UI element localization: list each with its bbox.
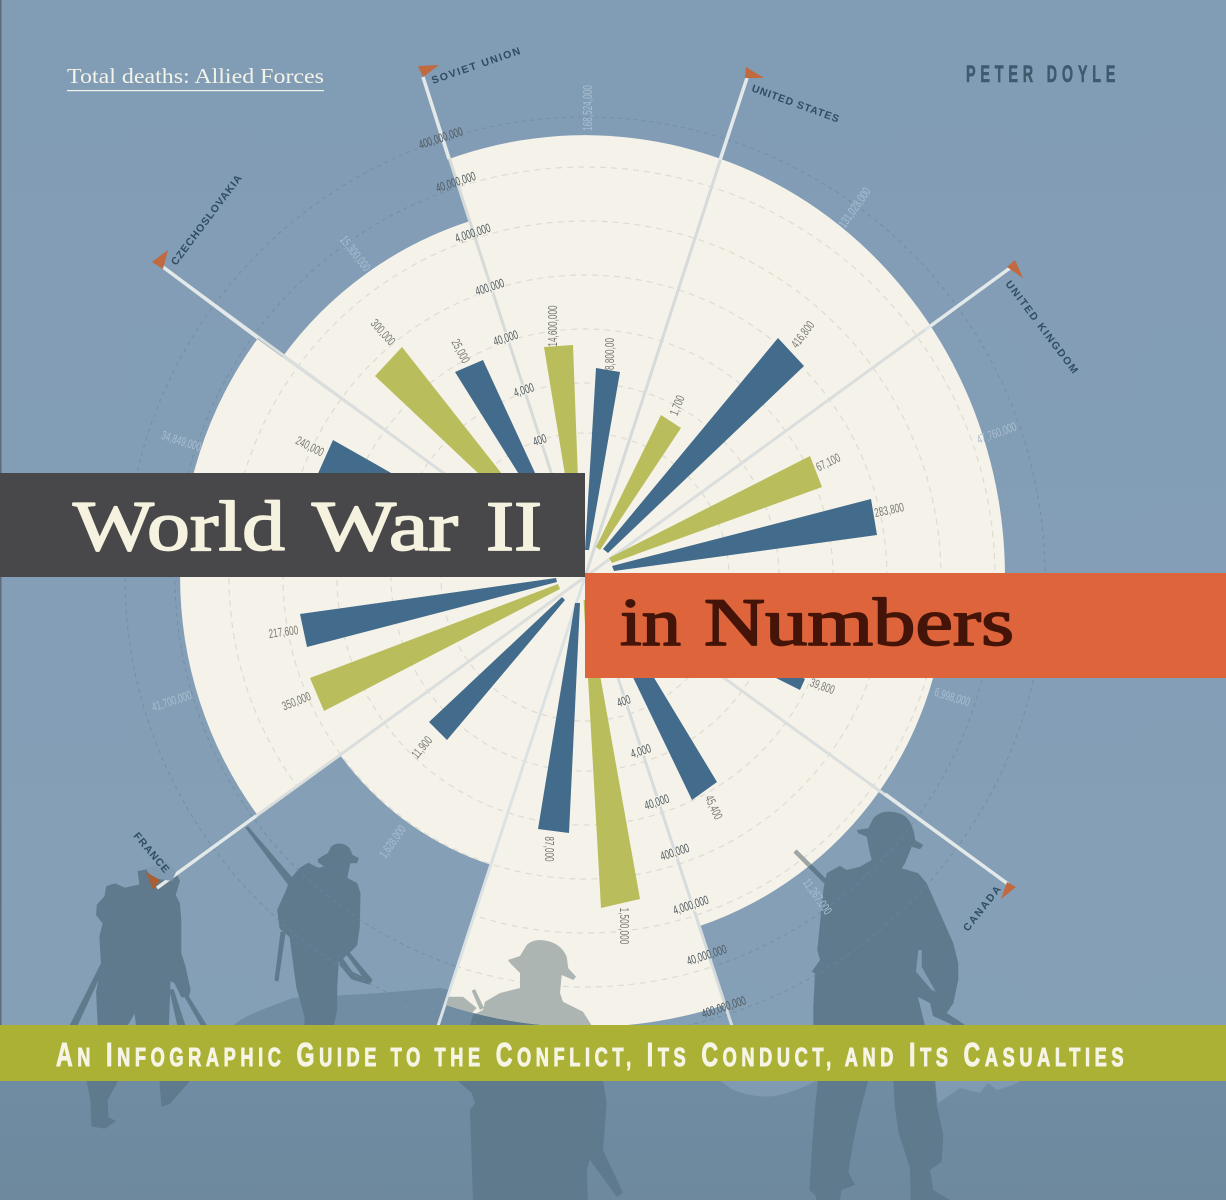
scale labels along the lower spoke: 400,000,000 [700, 994, 748, 1021]
scale labels along the lower spoke [615, 693, 748, 1021]
bar: 39,800 [640, 590, 805, 690]
flag: United Kingdom [1007, 260, 1023, 278]
bar: 25,000 [455, 360, 565, 540]
subtitle band: AN INFOGRAPHIC GUIDE TO THE CONFLICT, ITS CONDUCT, AND ITS CASUALTIES [56, 1037, 1124, 1074]
faint population labels on blue: 41,700,000 [150, 688, 194, 715]
scale labels along the Soviet spoke: 400,000 [474, 276, 506, 299]
title band: dark: II [486, 488, 542, 566]
flag: Czechoslovakia [152, 250, 168, 269]
bar: 1,700 [596, 415, 681, 550]
bar value labels: 8,800,00 [603, 338, 618, 370]
soldier: right [795, 812, 967, 1200]
bar value labels [268, 305, 905, 944]
faint population labels on blue [150, 85, 1019, 918]
scale labels along the lower spoke: 4,000,000 [671, 893, 711, 918]
faint population labels on blue: 168,524,000 [581, 85, 596, 131]
bar value labels: 217,600 [268, 623, 299, 642]
radial cream chart sectors [180, 135, 1005, 1027]
title band: orange [585, 573, 1226, 678]
bar: 416,800 [603, 338, 804, 553]
faint population labels on blue: 131,028,000 [836, 185, 874, 231]
bar: 1,500,000 [584, 600, 640, 908]
scale labels along the Soviet spoke: 400 [531, 432, 549, 449]
bar value labels: 1,500,000 [616, 908, 631, 944]
faint population labels on blue: 15,300,000 [337, 233, 373, 274]
bar: 87,000 [538, 603, 580, 833]
faint population labels on blue: 6,998,000 [932, 685, 972, 710]
soldier: far left [70, 870, 207, 1128]
outer faint rings on blue [125, 117, 1045, 1037]
bar value labels: 39,800 [808, 676, 837, 698]
country label: Canada: CANADA [961, 884, 1004, 934]
faint population labels on blue: 34,849,000 [159, 429, 203, 455]
bar value labels: 300,000 [367, 317, 398, 349]
bar: 350,000 [310, 584, 560, 711]
scale labels along the Soviet spoke: 400,000,000 [417, 125, 465, 152]
title band: dark: World [73, 488, 285, 566]
bar value labels: 25,000 [448, 337, 472, 366]
flag: Canada [1001, 882, 1016, 899]
title band: dark: War [312, 488, 458, 566]
flag: France [146, 872, 160, 890]
flag: United States [745, 67, 764, 78]
country label: United Kingdom: UNITED KINGDOM [1003, 279, 1080, 376]
dashed rings on cream [175, 167, 995, 987]
country label: France: FRANCE [131, 830, 171, 875]
bar: 283,800 [612, 499, 877, 571]
country label: Czechoslovakia: CZECHOSLOVAKIA [169, 172, 245, 268]
ground hill [0, 988, 1226, 1200]
country label: Soviet Union: SOVIET UNION [430, 45, 522, 87]
scale labels along the Soviet spoke: 40,000,000 [434, 169, 478, 196]
bar value labels: 14,600,000 [546, 305, 561, 347]
scale labels along the lower spoke: 4,000 [629, 742, 653, 762]
author: PETER DOYLE [966, 61, 1115, 88]
scale labels along the lower spoke: 400,000 [659, 841, 691, 864]
subtitle band [0, 1025, 1226, 1081]
bar value labels: 87,000 [541, 836, 556, 862]
scale labels along the Soviet spoke: 4,000,000 [453, 221, 493, 246]
scale labels along the Soviet spoke [417, 125, 549, 449]
soldier: second from left [246, 827, 372, 1026]
faint population labels on blue: 1,628,000 [377, 823, 409, 861]
title band: orange: in [620, 584, 681, 660]
soldier: centre, dark silhouette [457, 940, 623, 1200]
bar value labels: 416,800 [789, 319, 818, 351]
scale labels along the lower spoke: 400 [615, 693, 633, 710]
spokes [157, 77, 1010, 1026]
bars: deaths by country [300, 338, 877, 908]
title band: dark [0, 473, 585, 577]
heading: total deaths: Total deaths: Allied Forces [67, 64, 324, 88]
bar: 11,900 [429, 597, 565, 740]
title band: orange: Numbers [704, 584, 1014, 660]
country label: United States: UNITED STATES [750, 83, 841, 125]
patch behind France flag [146, 861, 176, 881]
bar: 45,400 [591, 590, 717, 800]
bar: 14,600,000 [544, 345, 581, 560]
bar value labels: 67,100 [814, 451, 843, 475]
bar: 8,800,00 [585, 368, 620, 550]
bar value labels: 11,900 [409, 734, 436, 762]
bar value labels: 283,800 [873, 500, 905, 521]
soldier overlays on cream [446, 851, 826, 1026]
bar: 240,000 [316, 440, 400, 478]
scale labels along the lower spoke: 40,000 [643, 792, 671, 813]
bar value labels: 1,700 [667, 393, 688, 418]
faint population labels on blue: 47,760,000 [975, 420, 1019, 447]
bar: 300,000 [375, 347, 554, 540]
spokes: lighter outer portions [157, 77, 1010, 888]
bar: 217,600 [300, 578, 557, 647]
scale labels along the lower spoke: 40,000,000 [685, 942, 729, 969]
scale labels along the Soviet spoke: 40,000 [492, 328, 520, 349]
flag: Soviet Union [418, 65, 439, 77]
bar value labels: 240,000 [293, 434, 326, 460]
faint population labels on blue: 11,267,000 [799, 876, 834, 918]
bar: 67,100 [609, 456, 822, 563]
bar value labels: 350,000 [280, 690, 313, 714]
bar value labels: 45,400 [701, 793, 725, 822]
scale labels along the Soviet spoke: 4,000 [512, 381, 536, 401]
